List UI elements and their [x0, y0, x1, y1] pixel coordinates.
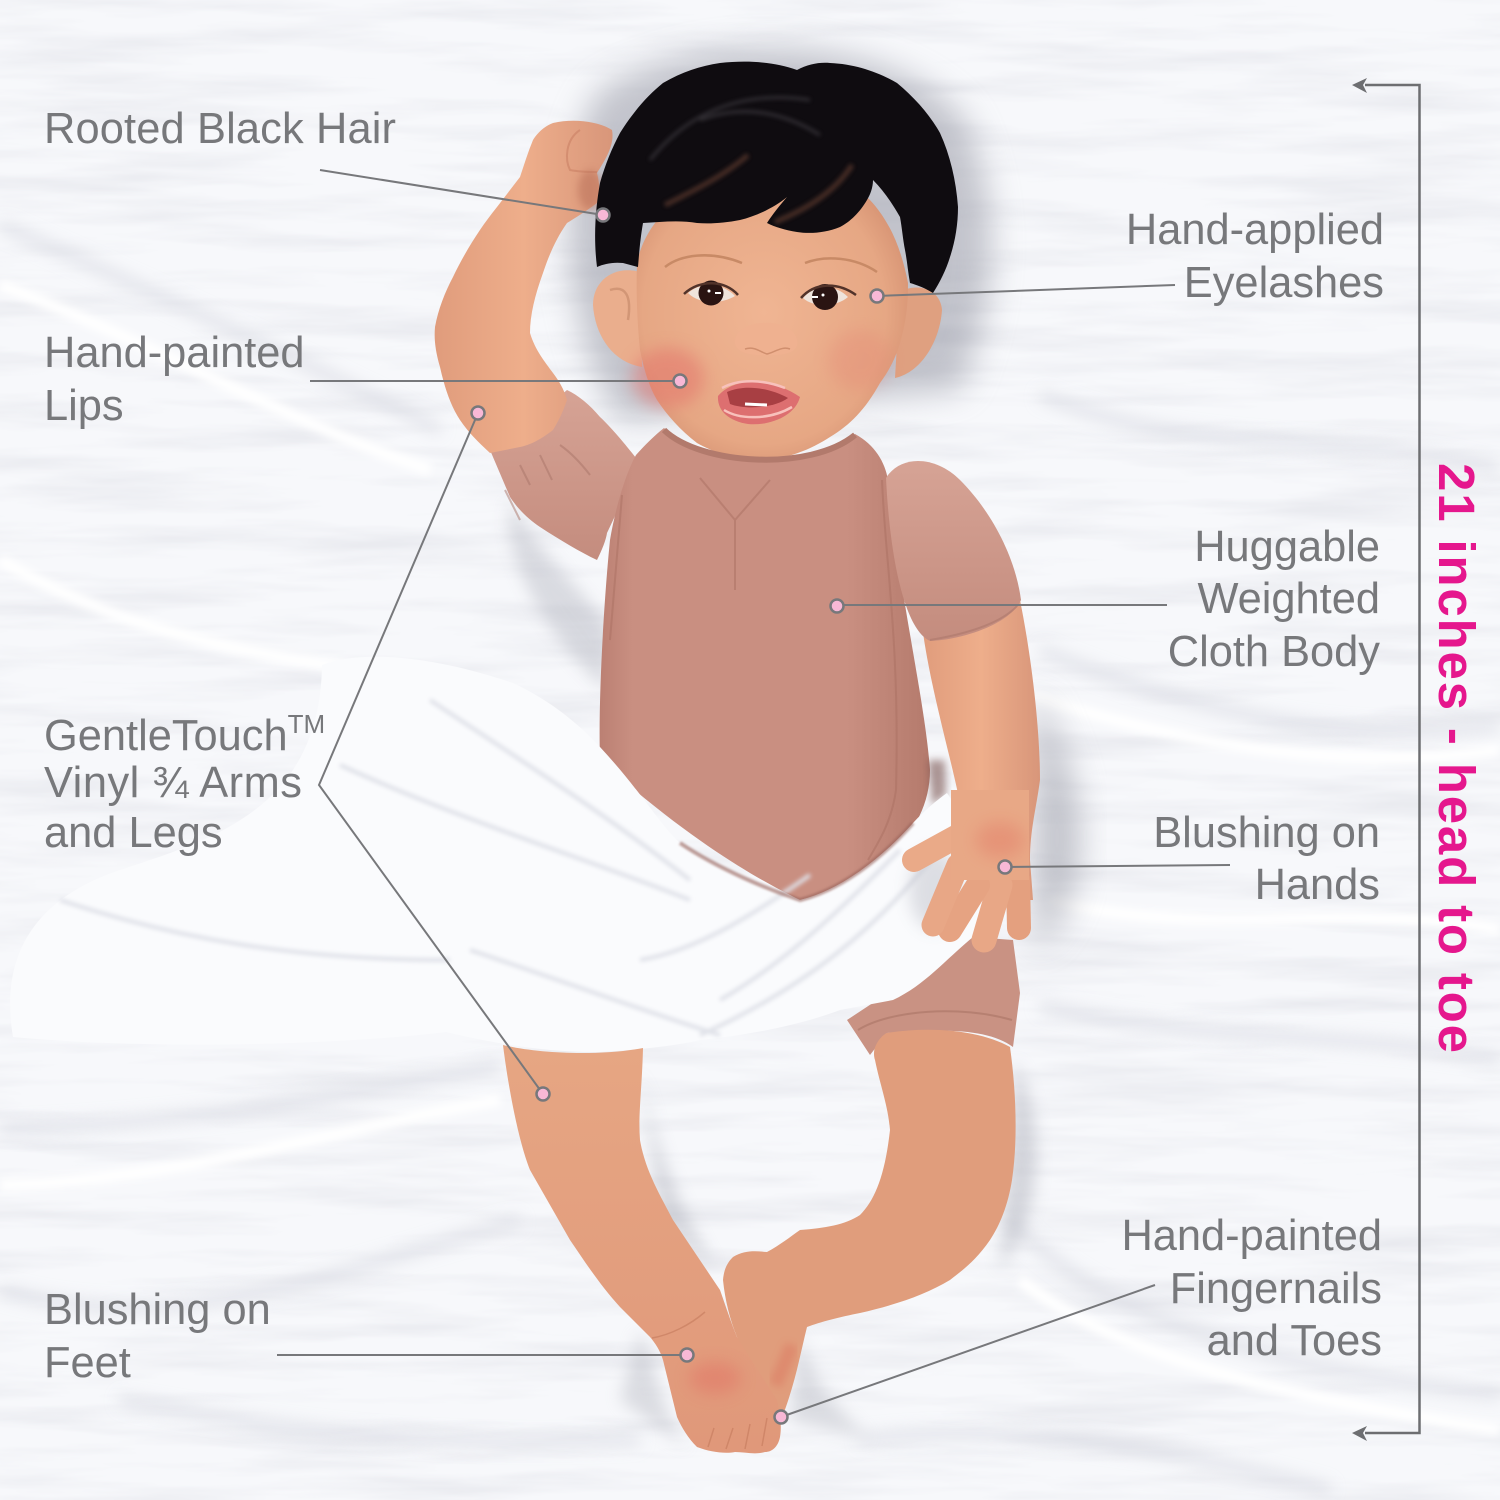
- label: hand-painted lips: Hand-painted: [44, 329, 305, 377]
- doll left ear: [593, 270, 642, 367]
- label: blushing on feet: Blushing on: [44, 1286, 271, 1334]
- doll eyes: [684, 280, 856, 310]
- label: blushing on hands: [998, 809, 1380, 909]
- doll near leg and foot: [723, 1030, 1016, 1420]
- label: huggable weighted cloth body: Weighted: [1197, 575, 1380, 623]
- label: hand-painted lips: Lips: [44, 382, 124, 430]
- draped blanket over the torso: [10, 657, 990, 1052]
- doll right ear: [895, 288, 942, 378]
- height bracket with arrows: [1352, 78, 1420, 1441]
- height measurement text: 21 inches - head to toe: [1428, 463, 1485, 1053]
- doll face: [637, 165, 908, 460]
- label: rooted black hair: [44, 105, 610, 222]
- label: gentletouch vinyl arms and legs: and Legs: [44, 809, 223, 857]
- label: hand-painted lips: [44, 329, 686, 430]
- doll nose: [735, 323, 797, 355]
- doll raised arm: [435, 121, 613, 453]
- label: gentletouch vinyl arms and legs: Vinyl ¾ Arms: [44, 759, 302, 807]
- doll collar: [664, 430, 855, 460]
- doll left sleeve: [490, 390, 640, 560]
- label: hand-painted fingernails and toes: Fingernails: [1170, 1265, 1382, 1313]
- label: rooted black hair: Rooted Black Hair: [44, 105, 396, 153]
- label: hand-applied eyelashes: [870, 206, 1384, 307]
- label: blushing on feet: [44, 1286, 694, 1387]
- label: hand-painted fingernails and toes: [774, 1212, 1382, 1424]
- doll shorts: [847, 937, 1020, 1055]
- shadow around the doll: [568, 48, 991, 420]
- label: hand-applied eyelashes: Hand-applied: [1126, 206, 1384, 254]
- doll hair: [595, 62, 958, 293]
- doll forearm: [922, 600, 1040, 900]
- label: huggable weighted cloth body: [830, 523, 1380, 676]
- label: gentletouch vinyl arms and legs: [44, 406, 550, 1100]
- label: hand-applied eyelashes: Eyelashes: [1184, 259, 1384, 307]
- doll cloth torso: [600, 428, 930, 900]
- label: gentletouch vinyl arms and legs: TM: [288, 709, 325, 739]
- label: huggable weighted cloth body: Cloth Body: [1168, 628, 1380, 676]
- doll mouth: [718, 381, 800, 424]
- doll cheeks: [632, 348, 704, 408]
- label: hand-painted fingernails and toes: and Toes: [1207, 1317, 1382, 1365]
- label: blushing on hands: Blushing on: [1153, 809, 1380, 857]
- label: gentletouch vinyl arms and legs: GentleTouch: [44, 712, 288, 760]
- label: blushing on hands: Hands: [1255, 861, 1380, 909]
- doll illustration: [10, 62, 1040, 1453]
- doll right sleeve: [886, 461, 1021, 641]
- doll far leg and foot: [503, 1045, 781, 1453]
- label: blushing on feet: Feet: [44, 1339, 131, 1387]
- doll hand and fingers: [914, 790, 1024, 940]
- label: hand-painted fingernails and toes: Hand-painted: [1121, 1212, 1382, 1260]
- doll eyebrows: [665, 255, 877, 272]
- label: huggable weighted cloth body: Huggable: [1194, 523, 1380, 571]
